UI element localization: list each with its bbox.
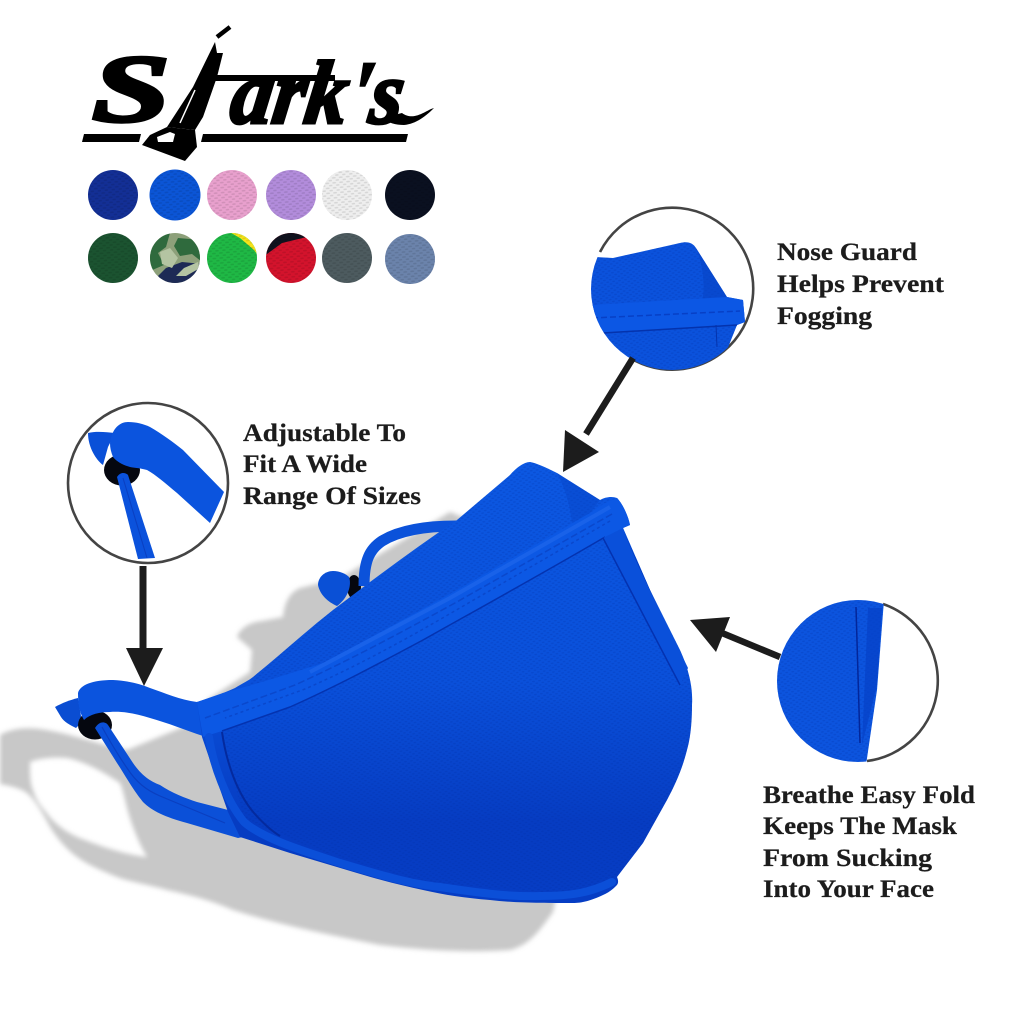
arrow: nose guard [563, 358, 633, 472]
callout: adjustable: Range Of Sizes [243, 481, 421, 510]
nose ridge shading [557, 473, 600, 523]
swatch fabric texture [88, 170, 435, 284]
swatch: royal blue [150, 170, 200, 220]
callout: nose guard: Fogging [777, 301, 872, 330]
swatch: lavender [266, 170, 316, 220]
callout: breathe easy fold: From Sucking [763, 843, 932, 872]
callout: breathe easy fold: Keeps The Mask [763, 811, 958, 840]
callout: nose guard: Nose Guard [777, 237, 917, 266]
logo: Stark's [82, 27, 434, 161]
mask body [197, 462, 692, 903]
swatch: navy blue [88, 170, 138, 220]
callout: breathe easy fold: Breathe Easy Fold [763, 780, 975, 809]
swatch: slate blue [385, 234, 435, 284]
swatch: camouflage [150, 233, 200, 283]
back ear strap [318, 526, 456, 606]
swatch: white [322, 170, 372, 220]
breathe-easy fold [603, 528, 688, 685]
nose guard lens [585, 208, 753, 380]
mask shadow [0, 512, 560, 951]
swatch: red with black [266, 233, 316, 283]
swatch: pink [207, 170, 257, 220]
swatch: forest green [88, 233, 138, 283]
lower trim [209, 737, 612, 896]
logo: Stark's: ark's [225, 42, 411, 143]
callout: nose guard: Helps Prevent [777, 269, 945, 298]
arrow: breathe easy fold [690, 617, 780, 657]
callout: adjustable: Fit A Wide [243, 449, 367, 478]
adjustable strap lens [68, 403, 228, 563]
front ear strap [55, 680, 252, 838]
callout: breathe easy fold: Into Your Face [763, 874, 934, 903]
arrow: adjustable strap [126, 566, 163, 686]
callout: adjustable: Adjustable To [243, 418, 406, 447]
swatch: black [385, 170, 435, 220]
front seam band [197, 498, 630, 737]
swatch: green with yellow [207, 233, 257, 283]
fold lens [777, 600, 940, 762]
mask [55, 462, 692, 903]
logo: Stark's: S [92, 35, 170, 142]
colour swatches [88, 170, 435, 286]
swatch: charcoal [322, 233, 372, 283]
